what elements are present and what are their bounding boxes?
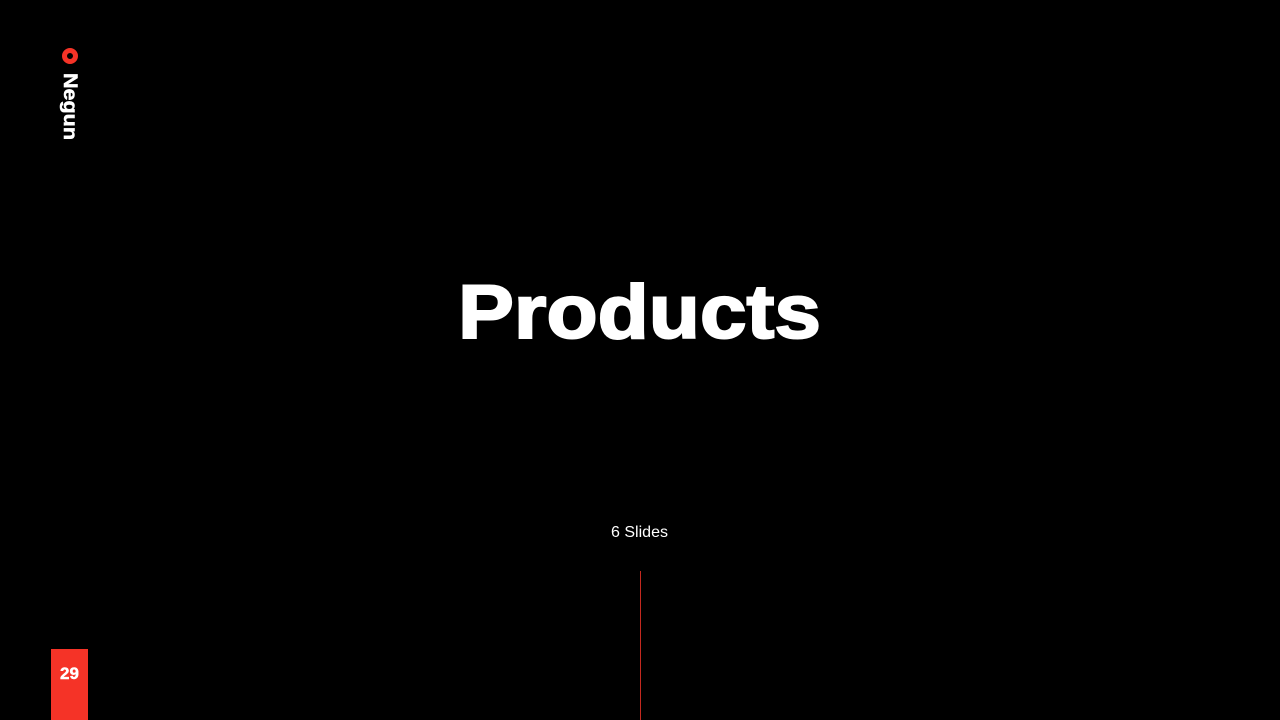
page number: 29 <box>60 664 79 683</box>
brand name, rotated: Negun <box>59 73 81 140</box>
subtitle: slide count: 6 Slides <box>611 524 668 541</box>
logo: Negun brand mark <box>59 50 81 140</box>
title: Products <box>458 270 821 355</box>
icon: red ring logo <box>64 50 76 62</box>
vertical accent line <box>640 571 641 720</box>
page number tab <box>51 649 88 720</box>
red tab <box>51 649 88 720</box>
